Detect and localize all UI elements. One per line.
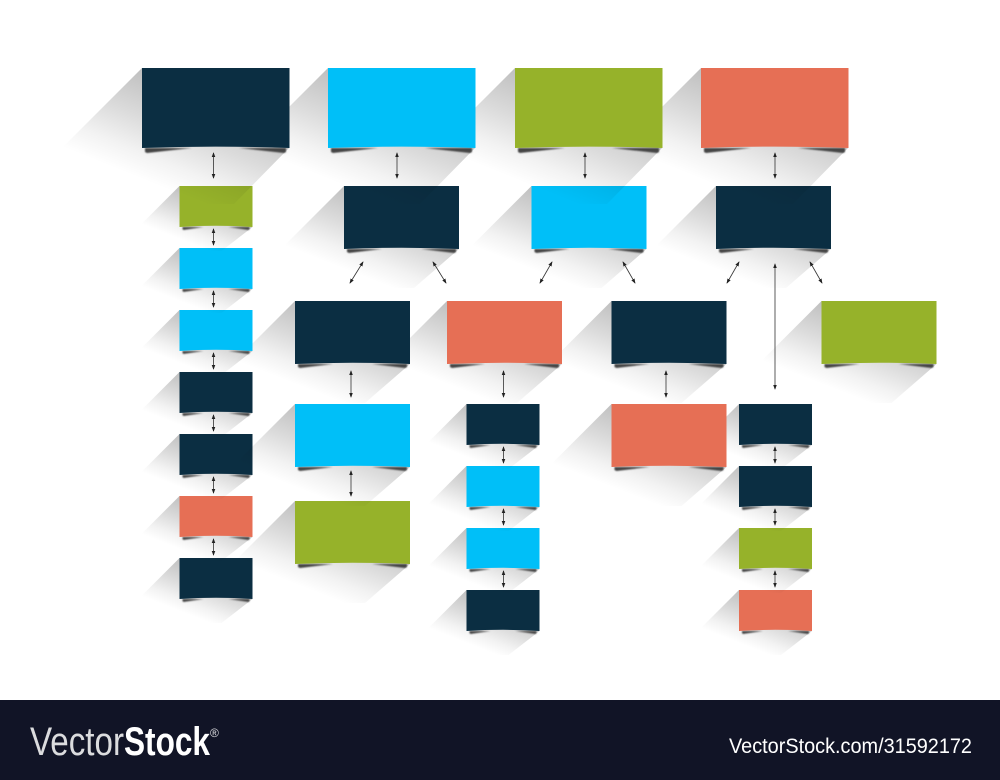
header box: red xyxy=(617,68,848,204)
box: dark branch xyxy=(548,301,726,403)
box: dark, column 4 xyxy=(698,404,812,469)
footer bar xyxy=(0,700,1000,780)
box: blue, column 2 xyxy=(231,404,410,506)
box: red, third branch xyxy=(548,404,726,506)
arrows xyxy=(214,153,822,587)
box: red, column 1 xyxy=(138,496,252,561)
box: dark branch xyxy=(231,301,410,403)
box: dark, column 1 xyxy=(138,372,252,437)
box: blue, column 3 xyxy=(426,466,540,531)
image id text: VectorStock.com/31592172 xyxy=(729,735,972,758)
header box: green xyxy=(431,68,662,204)
box: green, column 1 xyxy=(138,186,252,251)
box: green, column 2 bottom xyxy=(231,501,410,603)
box: second level dark right xyxy=(652,186,831,288)
logo: VectorStock: ® xyxy=(210,726,219,740)
logo: VectorStock: Stock xyxy=(124,720,211,764)
box: green branch xyxy=(758,301,936,403)
box: blue, column 1 xyxy=(138,310,252,375)
box: red, column 4 bottom xyxy=(698,590,812,655)
box: blue, column 1 xyxy=(138,248,252,313)
box: blue, column 3 xyxy=(426,528,540,593)
header box: dark xyxy=(58,68,290,204)
logo: VectorStock: Vector xyxy=(30,720,124,764)
header box: blue xyxy=(244,68,476,204)
box: second level dark left xyxy=(280,186,459,288)
box: green, column 4 xyxy=(698,528,812,593)
box: second level blue xyxy=(468,186,646,288)
box: red branch xyxy=(383,301,562,403)
box: dark, column 3 bottom xyxy=(426,590,540,655)
box: dark, column 3 xyxy=(426,404,540,469)
logo: VectorStock xyxy=(30,720,219,764)
box: dark, column 1 xyxy=(138,434,252,499)
box: dark, column 1 bottom xyxy=(138,558,252,623)
box: dark, column 4 xyxy=(698,466,812,531)
